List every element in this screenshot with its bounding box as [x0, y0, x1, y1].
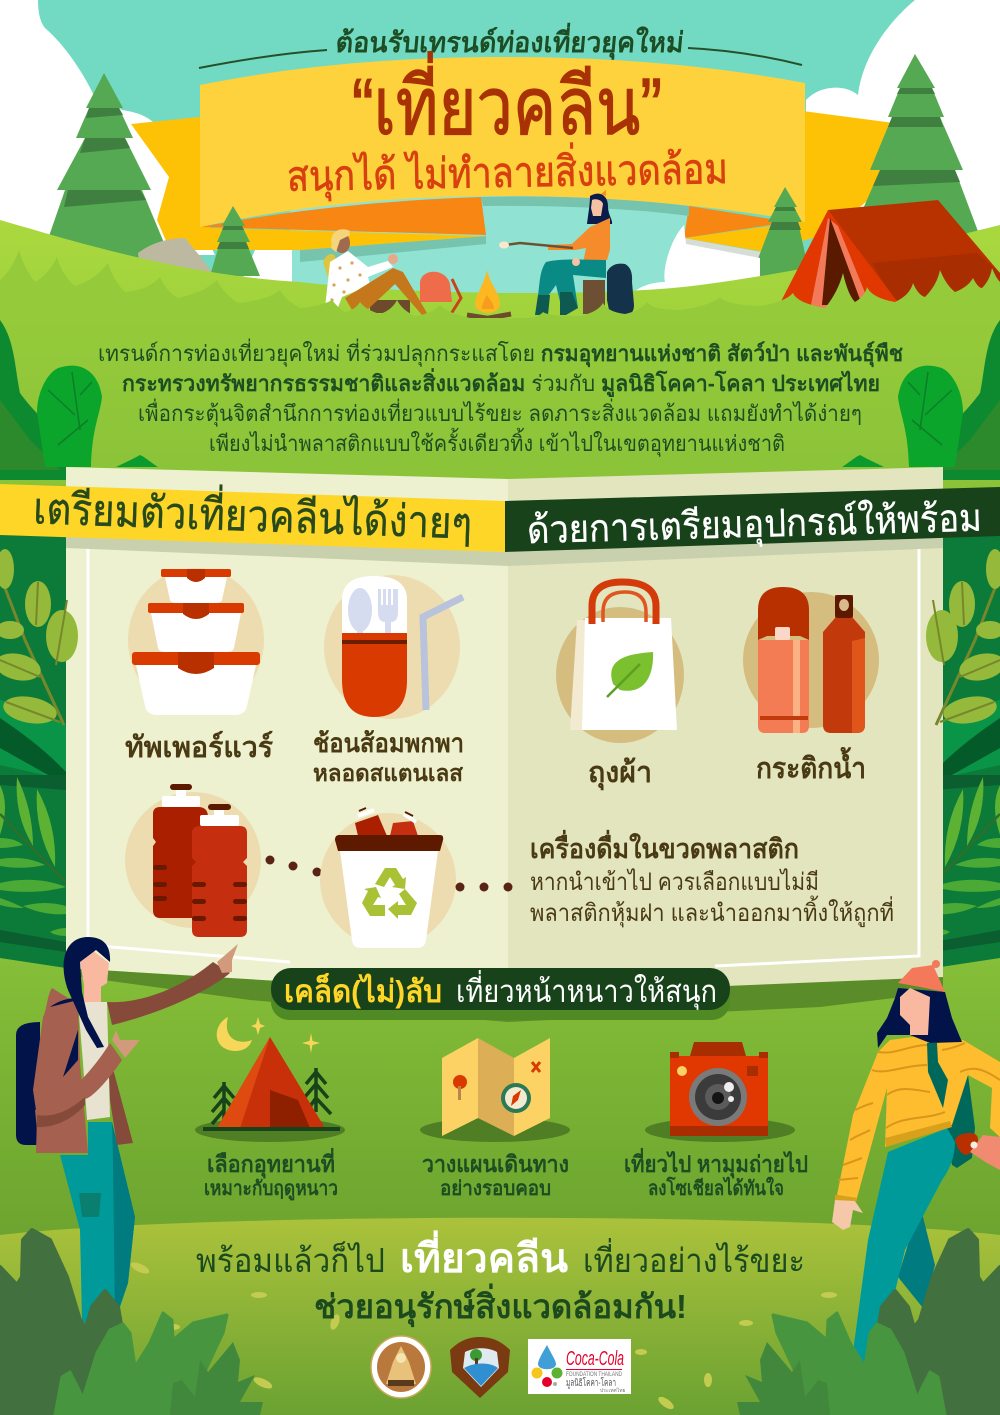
- logo: coca-cola foundation: [528, 1339, 631, 1394]
- tent: [775, 200, 1000, 313]
- lower green background: [0, 950, 1000, 1250]
- top heading: [199, 22, 802, 68]
- foliage right lower: [934, 530, 1000, 968]
- closing message: พร้อมแล้วก็ไป: [196, 1241, 385, 1279]
- foreground grass: [0, 250, 1000, 330]
- label: take photos: [624, 1147, 808, 1200]
- label: cutlery and straw: [313, 728, 464, 786]
- campers: [323, 190, 634, 322]
- foliage right upper: [842, 320, 1000, 480]
- foliage left lower: [0, 530, 66, 968]
- lake: [290, 195, 690, 315]
- intro paragraph: เพื่อกระตุ้นจิตสำนึกการท่องเที่ยวแบบไร้ขยะ ลดภาระสิ่งแวดล้อม แถมยังทำได้ง่ายๆ: [138, 398, 862, 427]
- label: choose park: เลือกอุทยานที่: [207, 1147, 335, 1179]
- icon: cloth bag: [556, 582, 684, 743]
- pine tree left small: [210, 206, 260, 276]
- intro paragraph: [98, 338, 903, 457]
- pine tree left big: [40, 73, 172, 262]
- label: choose park: [204, 1147, 338, 1202]
- foliage left upper: [0, 320, 158, 480]
- top heading: ต้อนรับเทรนด์ท่องเที่ยวยุคใหม่: [334, 22, 686, 60]
- logo: coca-cola foundation: FOUNDATION THAILAND: [566, 1372, 623, 1378]
- backpack and log: [583, 264, 634, 315]
- label: cutlery and straw: ช้อนส้อมพกพา: [313, 728, 464, 758]
- panel: equipment booklet: [66, 467, 943, 995]
- cloud lower right lake: [628, 225, 760, 298]
- tips heading pill: เคล็ด(ไม่)ลับ: [284, 972, 442, 1009]
- closing message: เที่ยวคลีน: [400, 1230, 568, 1281]
- campfire: [467, 270, 511, 322]
- label: cloth bag: ถุงผ้า: [588, 757, 652, 790]
- closing message: [196, 1230, 805, 1328]
- logo: coca-cola foundation: ประเทศไทย: [600, 1387, 626, 1394]
- label: take photos: เที่ยวไป หามุมถ่ายไป: [624, 1147, 808, 1179]
- pine tree right big: [845, 54, 985, 250]
- intro paragraph: เพียงไม่นำพลาสติกแบบใช้ครั้งเดียวทิ้ง เข้าไปในเขตอุทยานแห่งชาติ: [209, 428, 785, 457]
- foreground bushes left: [0, 1230, 263, 1415]
- camper left: [323, 229, 461, 315]
- middle green background: [0, 318, 1000, 558]
- label: water bottles: กระติกน้ำ: [756, 746, 866, 785]
- person: woman pointing: [16, 937, 238, 1327]
- icon: tent at night: [195, 1017, 345, 1142]
- small leaves scattered on the hill: [129, 1260, 837, 1411]
- closing message: เที่ยวอย่างไร้ขยะ: [583, 1238, 805, 1279]
- tips heading pill: [271, 968, 730, 1020]
- text block: plastic bottles advice: หากนำเข้าไป ควรเลือกแบบไม่มี: [530, 868, 819, 896]
- connector dots: [456, 882, 512, 892]
- foreground bushes right: [737, 1230, 1000, 1415]
- cloud left: [0, 0, 215, 255]
- camper right: [499, 190, 612, 315]
- label: plan the trip: อย่างรอบคอบ: [440, 1178, 551, 1200]
- intro paragraph: เทรนด์การท่องเที่ยวยุคใหม่ ที่ร่วมปลุกกระแสโดย กรมอุทยานแห่งชาติ สัตว์ป่า และพันธุ์พืช: [98, 338, 903, 368]
- panel shadow: [66, 960, 943, 1022]
- text block: plastic bottles advice: เครื่องดื่มในขวดพลาสติก: [530, 829, 799, 864]
- bottom hill: [0, 1218, 1000, 1415]
- tips heading pill: เที่ยวหน้าหนาวให้สนุก: [456, 970, 717, 1011]
- connector dots: [266, 856, 322, 876]
- label: plan the trip: [422, 1151, 569, 1200]
- logo: coca-cola foundation: มูลนิธิโคคา-โคลา: [566, 1376, 616, 1389]
- intro paragraph: กระทรวงทรัพยากรธรรมชาติและสิ่งแวดล้อม ร่วมกับ มูลนิธิโคคา-โคลา ประเทศไทย: [122, 367, 880, 398]
- icon: cutlery and straw: [324, 575, 463, 719]
- leaf branch left: [0, 549, 78, 727]
- closing message: ช่วยอนุรักษ์สิ่งแวดล้อมกัน!: [314, 1283, 687, 1328]
- text block: plastic bottles advice: พลาสติกหุ้มฝา และนำออกมาทิ้งให้ถูกที่: [530, 895, 894, 928]
- rock: [138, 238, 212, 272]
- label: choose park: เหมาะกับฤดูหนาว: [204, 1178, 338, 1202]
- logo: coca-cola foundation: Coca-Cola: [566, 1348, 624, 1370]
- subtitle: สนุกได้ ไม่ทำลายสิ่งแวดล้อม: [286, 140, 728, 203]
- label: tupperware: ทัพเพอร์แวร์: [125, 730, 273, 764]
- banner back wings: [131, 110, 909, 285]
- main banner: [200, 57, 805, 227]
- logo: department seal: [371, 1336, 431, 1398]
- icon: plastic bottles: [125, 784, 261, 937]
- leaf branch right: [926, 549, 1000, 727]
- icon: water bottles: [743, 587, 879, 733]
- icon: map: [420, 1038, 570, 1142]
- text block: plastic bottles advice: [530, 829, 894, 928]
- icon: recycle bin: [320, 808, 456, 948]
- label: plan the trip: วางแผนเดินทาง: [422, 1151, 569, 1177]
- pine tree right small: [748, 187, 812, 285]
- person: woman with sweater: [832, 960, 1000, 1366]
- label: cutlery and straw: หลอดสแตนเลส: [313, 760, 464, 786]
- icon: tupperware: [128, 568, 264, 715]
- cloud right: [806, 0, 1000, 260]
- ribbon left: เตรียมตัวเที่ยวคลีนได้ง่ายๆ: [33, 477, 473, 549]
- main title: “เที่ยวคลีน”: [352, 52, 662, 151]
- icon: camera: [645, 1042, 795, 1142]
- logo: national park shield: [450, 1337, 510, 1398]
- sky background: [0, 0, 1000, 330]
- hill: [0, 220, 1000, 330]
- label: take photos: ลงโซเชียลได้ทันใจ: [648, 1176, 784, 1200]
